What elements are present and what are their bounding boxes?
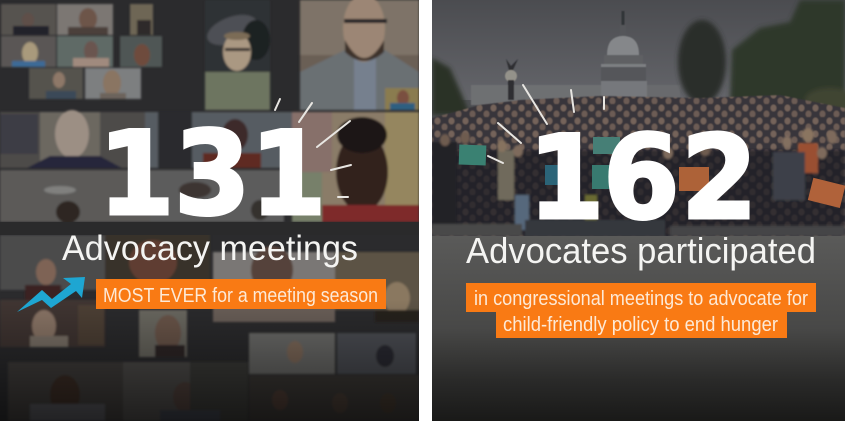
sparkle lines right	[488, 85, 604, 163]
stat number: 162: 162	[528, 110, 758, 246]
callout: most ever	[96, 279, 386, 309]
heading: Advocates participated: Advocates participated	[466, 230, 816, 271]
panel: Capitol group photo	[432, 0, 845, 421]
sign: teal placard left	[459, 145, 486, 165]
icon: rising arrow	[17, 277, 85, 312]
sparkle lines left	[275, 99, 351, 197]
callout: congressional meetings: in congressional meetings to advocate for	[474, 288, 808, 310]
sign: orange Advocate placard	[679, 167, 709, 191]
callout: congressional meetings	[466, 283, 816, 338]
sign: orange Advocate placard right	[808, 178, 845, 208]
heading: Advocacy meetings: Advocacy meetings	[62, 229, 358, 268]
panel: virtual meetings photo collage	[0, 0, 420, 421]
sign: teal placard centre	[593, 137, 620, 154]
callout: most ever: MOST EVER for a meeting season	[103, 285, 378, 307]
white divider between panels	[419, 0, 432, 421]
callout: congressional meetings: child-friendly policy to end hunger	[503, 314, 778, 336]
sign: blue placard	[545, 165, 563, 185]
sign: teal placard lower	[592, 165, 614, 189]
stat number: 131: 131	[98, 106, 327, 242]
